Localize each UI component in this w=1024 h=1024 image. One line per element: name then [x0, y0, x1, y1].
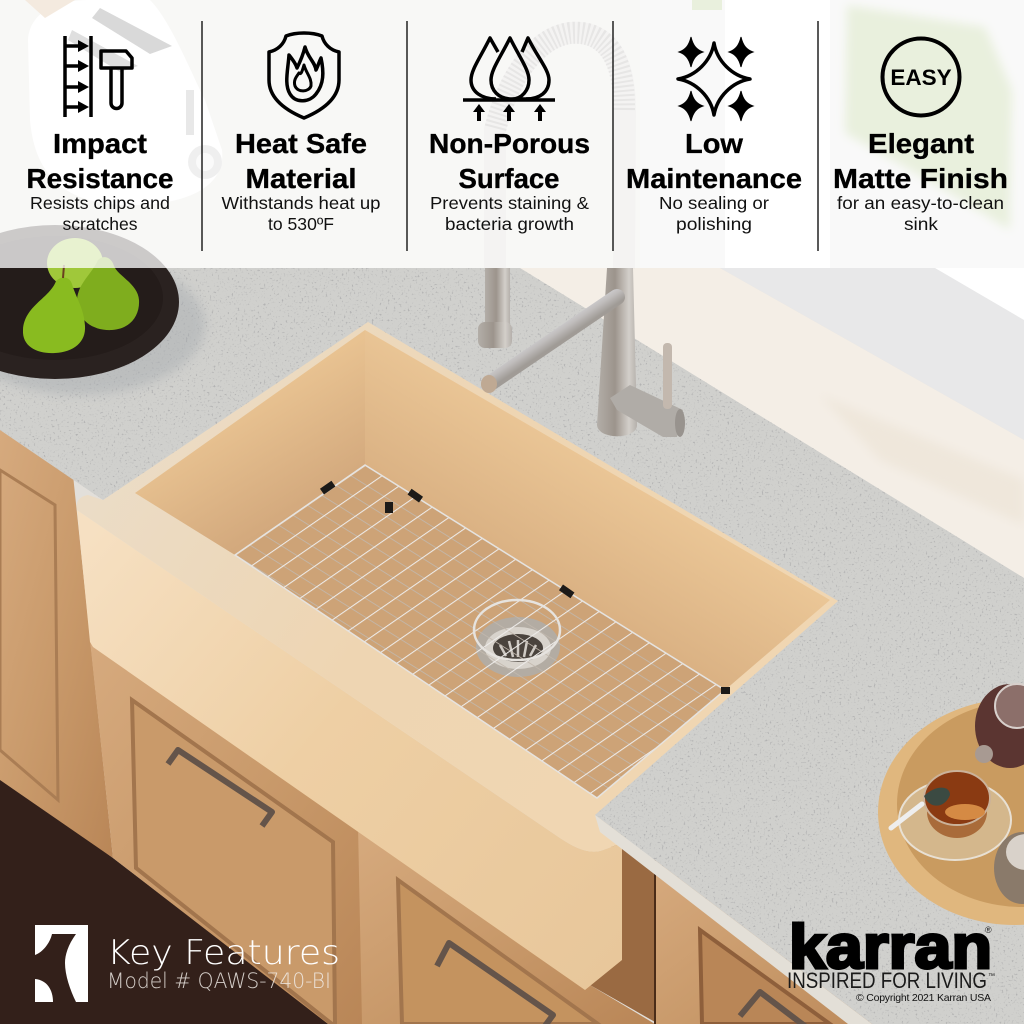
- handle one: [168, 750, 272, 826]
- feature: low maintenance: polishing: [676, 214, 752, 234]
- wordmark: karran: [789, 913, 992, 982]
- feature: non-porous surface: [429, 38, 590, 234]
- description: Withstands heat up: [222, 193, 380, 213]
- apron front: [77, 510, 622, 990]
- drain: [476, 617, 560, 677]
- lower door two: [358, 825, 655, 1024]
- copyright: © Copyright 2021 Karran USA: [856, 992, 991, 1004]
- footer: key features label: [35, 925, 340, 1002]
- feature: non-porous surface: Surface: [458, 163, 560, 194]
- floor: [0, 775, 330, 1024]
- handle two: [437, 943, 553, 1024]
- left wall: [135, 330, 365, 555]
- description: Prevents staining &: [430, 193, 589, 213]
- dividers: [202, 21, 818, 251]
- teapot: [975, 684, 1024, 768]
- jar: [994, 832, 1024, 904]
- plate with pears: [0, 225, 179, 379]
- heading: Non-Porous: [429, 128, 590, 159]
- description: for an easy-to-clean: [837, 193, 1004, 213]
- spout: [489, 297, 617, 384]
- grid bumpers: [320, 481, 730, 694]
- footer: karran logo: ™: [988, 973, 995, 980]
- spring neck: [495, 33, 625, 268]
- right pear: [77, 257, 139, 330]
- handle three: [740, 992, 810, 1024]
- rim: [77, 318, 840, 852]
- icon: k logo mark: [35, 925, 88, 1002]
- feature: heat safe material: [222, 33, 380, 234]
- front pear: [23, 277, 85, 353]
- feature: impact resistance: [26, 36, 174, 234]
- cabinets: [0, 425, 900, 1024]
- feature: low maintenance: [626, 37, 802, 234]
- saucer: [899, 780, 1011, 860]
- side panel next to apron: [590, 835, 655, 1022]
- tea cup: [927, 812, 987, 838]
- icon: shield with flame: [269, 33, 339, 118]
- heading: Elegant: [868, 128, 974, 159]
- icon: water drops on surface: [463, 38, 555, 121]
- footer: karran logo: [787, 913, 995, 1004]
- basin floor: [235, 465, 725, 798]
- spoon: [891, 804, 922, 828]
- heading: Key Features: [107, 933, 340, 973]
- icon: easy badge: [882, 38, 960, 116]
- feature: elegant matte finish: [833, 38, 1008, 234]
- model number: Model # QAWS-740-BI: [107, 969, 331, 993]
- countertop front edge: [595, 815, 872, 1024]
- description: Resists chips and: [30, 193, 170, 213]
- feature: heat safe material: to 530ºF: [268, 214, 334, 234]
- feature: non-porous surface: bacteria growth: [445, 214, 574, 234]
- countertop: [0, 268, 1024, 1024]
- faucet: [478, 33, 685, 437]
- back pear: [47, 238, 103, 288]
- registered mark: ®: [985, 925, 992, 935]
- icon: easy badge: EASY: [890, 65, 952, 90]
- heading: Heat Safe: [235, 128, 367, 159]
- feature: elegant matte finish: sink: [904, 214, 938, 234]
- feature: low maintenance: Maintenance: [626, 163, 802, 194]
- icon: sparkles: [678, 37, 753, 121]
- tagline: INSPIRED FOR LIVING: [787, 968, 987, 993]
- feature: elegant matte finish: Matte Finish: [833, 163, 1008, 194]
- heading: Low: [685, 128, 743, 159]
- lower door one: [90, 640, 362, 1024]
- left cabinet: [0, 425, 113, 858]
- plate shadow on counter: [0, 278, 206, 396]
- drain basket ring: [474, 600, 560, 660]
- feature: impact resistance: scratches: [62, 214, 138, 234]
- lower door three: [656, 861, 872, 1024]
- heading: Impact: [53, 128, 147, 159]
- back wall: [365, 330, 830, 690]
- icon: wall with arrows and hammer: [65, 36, 132, 117]
- translucent top banner: [0, 0, 1024, 268]
- lever: [610, 343, 685, 437]
- sink: [77, 318, 840, 990]
- feature: impact resistance: Resistance: [26, 163, 174, 194]
- toaster: [25, 0, 222, 205]
- spray head: [478, 268, 512, 348]
- bottom grid: [235, 465, 725, 798]
- description: No sealing or: [659, 193, 769, 213]
- feature: heat safe material: Material: [246, 163, 356, 194]
- faucet body: [597, 268, 637, 436]
- wooden tray with tea set: [878, 684, 1024, 925]
